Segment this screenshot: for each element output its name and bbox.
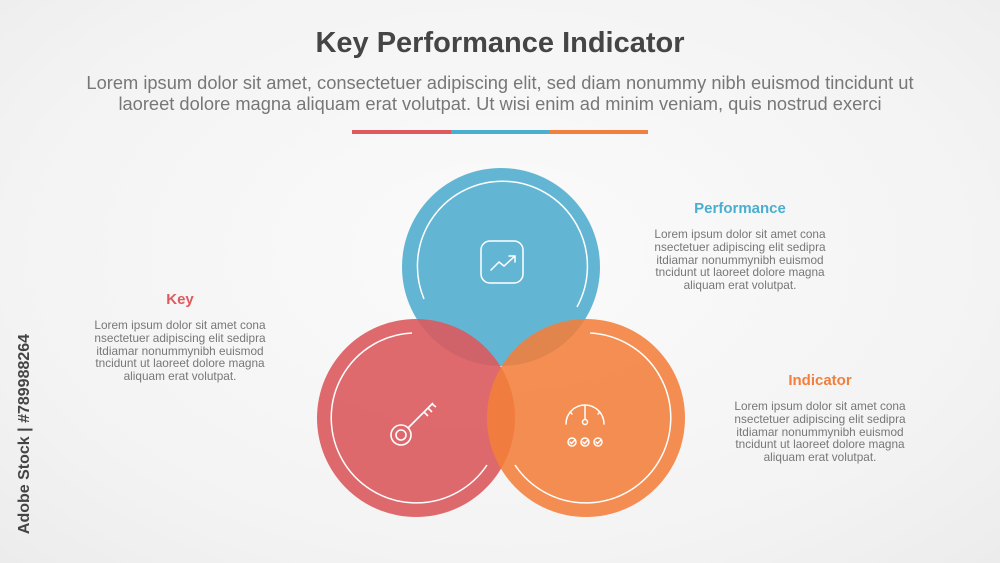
icon: key bbox=[391, 403, 436, 445]
title: Key Performance Indicator bbox=[315, 27, 685, 59]
subtitle: laoreet dolore magna aliquam erat volutpat. Ut wisi enim ad minim veniam, quis nostrud exerci bbox=[118, 93, 882, 114]
subtitle: Lorem ipsum dolor sit amet, consectetuer adipiscing elit, sed diam nonummy nibh euismod tincidunt ut bbox=[86, 72, 914, 93]
text: key bbox=[94, 318, 266, 383]
text: key: tncidunt ut laoreet dolore magna bbox=[95, 356, 265, 370]
text: performance: itdiamar nonummynibh euismod bbox=[656, 253, 824, 267]
circle: indicator bbox=[487, 319, 685, 517]
circle: key bbox=[317, 319, 515, 517]
icon: gauge bbox=[566, 405, 604, 446]
text: key: nsectetuer adipiscing elit sedipra bbox=[94, 331, 266, 345]
text: indicator: Lorem ipsum dolor sit amet cona bbox=[734, 399, 906, 413]
text: performance: aliquam erat volutpat. bbox=[684, 278, 796, 292]
circle: performance bbox=[402, 168, 600, 366]
text: performance: nsectetuer adipiscing elit sedipra bbox=[654, 240, 826, 254]
text: key: itdiamar nonummynibh euismod bbox=[96, 344, 264, 358]
heading: key: Key bbox=[166, 291, 194, 308]
text: indicator bbox=[734, 399, 906, 464]
text: indicator: tncidunt ut laoreet dolore magna bbox=[735, 437, 905, 451]
text: indicator: nsectetuer adipiscing elit sedipra bbox=[734, 412, 906, 426]
text: indicator: itdiamar nonummynibh euismod bbox=[736, 425, 904, 439]
heading: indicator: Indicator bbox=[788, 372, 852, 389]
watermark side text: Adobe Stock | #789988264 bbox=[16, 334, 33, 534]
icon: chart bbox=[481, 241, 523, 283]
subtitle bbox=[86, 72, 914, 114]
color bar bbox=[352, 130, 648, 134]
text: performance: Lorem ipsum dolor sit amet cona bbox=[654, 227, 826, 241]
text: indicator: aliquam erat volutpat. bbox=[764, 450, 876, 464]
text: key: Lorem ipsum dolor sit amet cona bbox=[94, 318, 266, 332]
heading: performance: Performance bbox=[694, 200, 786, 217]
text: performance: tncidunt ut laoreet dolore magna bbox=[655, 265, 825, 279]
text: key: aliquam erat volutpat. bbox=[124, 369, 236, 383]
text: performance bbox=[654, 227, 826, 292]
